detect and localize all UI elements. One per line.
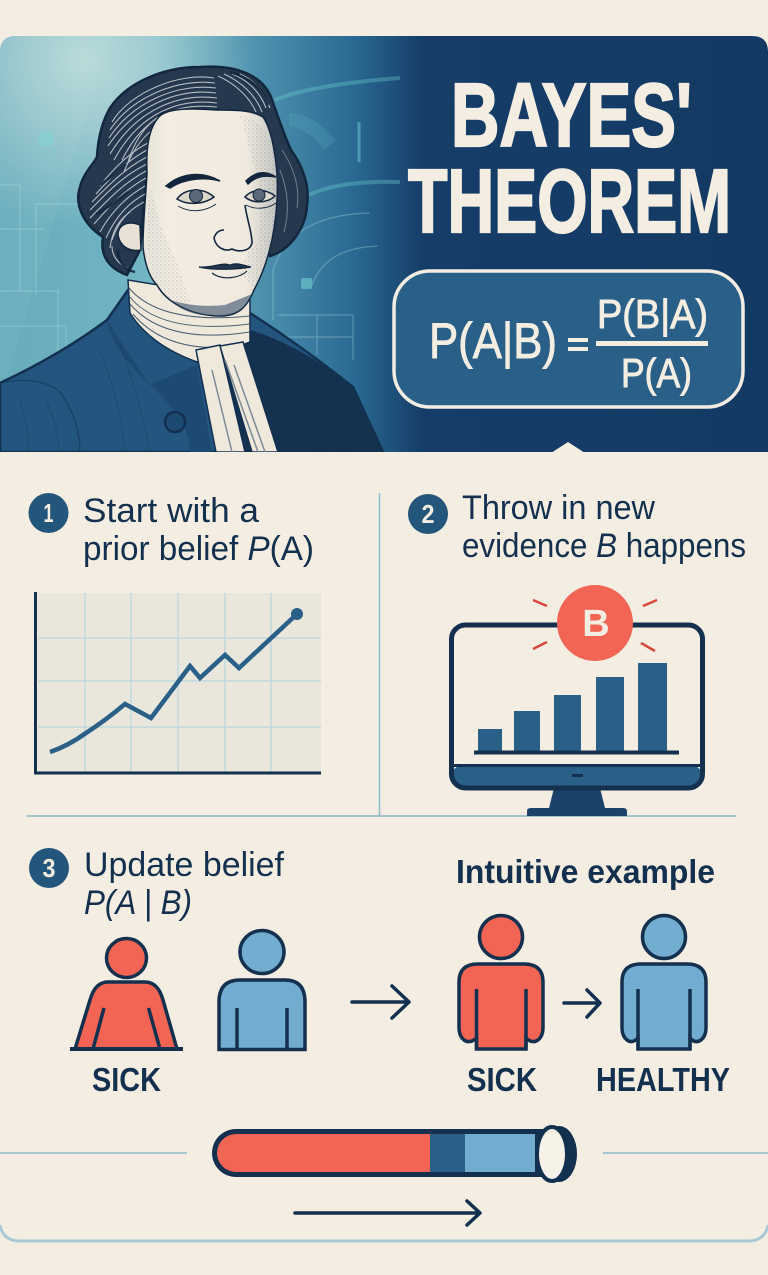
fraction bar — [596, 341, 708, 346]
person: healthy before — [219, 930, 305, 1050]
sick label after: SICK — [467, 1061, 537, 1098]
eyes and brows — [166, 173, 276, 211]
neck stock — [128, 280, 250, 362]
arrow: bottom direction — [295, 1201, 480, 1225]
line chart — [36, 592, 321, 773]
step 2 text — [462, 489, 746, 565]
panel: header banner — [0, 36, 768, 453]
coat — [0, 290, 383, 452]
evidence B badge — [533, 585, 657, 661]
monitor — [452, 625, 702, 816]
step 1 badge: 1 — [44, 498, 54, 528]
healthy label: HEALTHY — [596, 1061, 730, 1098]
banner background — [0, 36, 768, 452]
coat button — [165, 412, 185, 432]
step 3 badge: 3 — [42, 853, 56, 883]
banner notch — [551, 442, 585, 453]
probability bar — [212, 1126, 577, 1182]
nose and mouth — [199, 205, 252, 278]
portrait of Thomas Bayes — [0, 67, 383, 452]
step 2 text: evidence B happens — [462, 527, 746, 565]
person: sick before — [70, 938, 183, 1049]
person: healthy after — [622, 916, 706, 1049]
step 2 text: Throw in new — [462, 489, 655, 527]
dividers — [27, 493, 736, 816]
step 1 text: Start with a — [83, 492, 259, 530]
title line 1: BAYES' — [451, 66, 692, 166]
step 1 text — [83, 492, 314, 568]
step 2 badge — [408, 494, 448, 534]
side rules beside probability bar — [0, 1152, 768, 1154]
evidence B badge: B — [582, 603, 610, 645]
step 3 badge — [29, 848, 69, 888]
step 3 text: Update belief — [84, 846, 285, 884]
equals sign — [568, 338, 588, 351]
denominator: P(A) — [621, 350, 692, 396]
arrow: before to after — [352, 986, 409, 1018]
bottom frame line — [0, 1225, 768, 1241]
sick label: SICK — [92, 1061, 161, 1098]
formula left side: P(A|B) — [429, 313, 557, 369]
neckband tabs — [196, 345, 245, 452]
intuitive example heading: Intuitive example — [456, 853, 715, 890]
bar chart on monitor — [474, 663, 679, 754]
step 3 text — [84, 846, 285, 922]
arrow: sick to healthy — [564, 990, 600, 1017]
hair — [78, 67, 308, 275]
panel: step 3 update belief — [29, 846, 730, 1098]
person: sick after — [459, 916, 543, 1049]
step 1 text: prior belief P(A) — [83, 530, 314, 568]
face — [143, 109, 277, 316]
panel: step 2 new evidence — [408, 489, 746, 816]
title — [408, 66, 731, 252]
step 2 badge: 2 — [422, 499, 434, 529]
formula box — [394, 271, 743, 407]
ear — [118, 223, 141, 250]
step 1 badge — [28, 493, 68, 533]
panel: step 1 prior belief — [28, 492, 321, 773]
numerator: P(B|A) — [597, 291, 708, 337]
step 3 text: P(A | B) — [84, 884, 192, 922]
